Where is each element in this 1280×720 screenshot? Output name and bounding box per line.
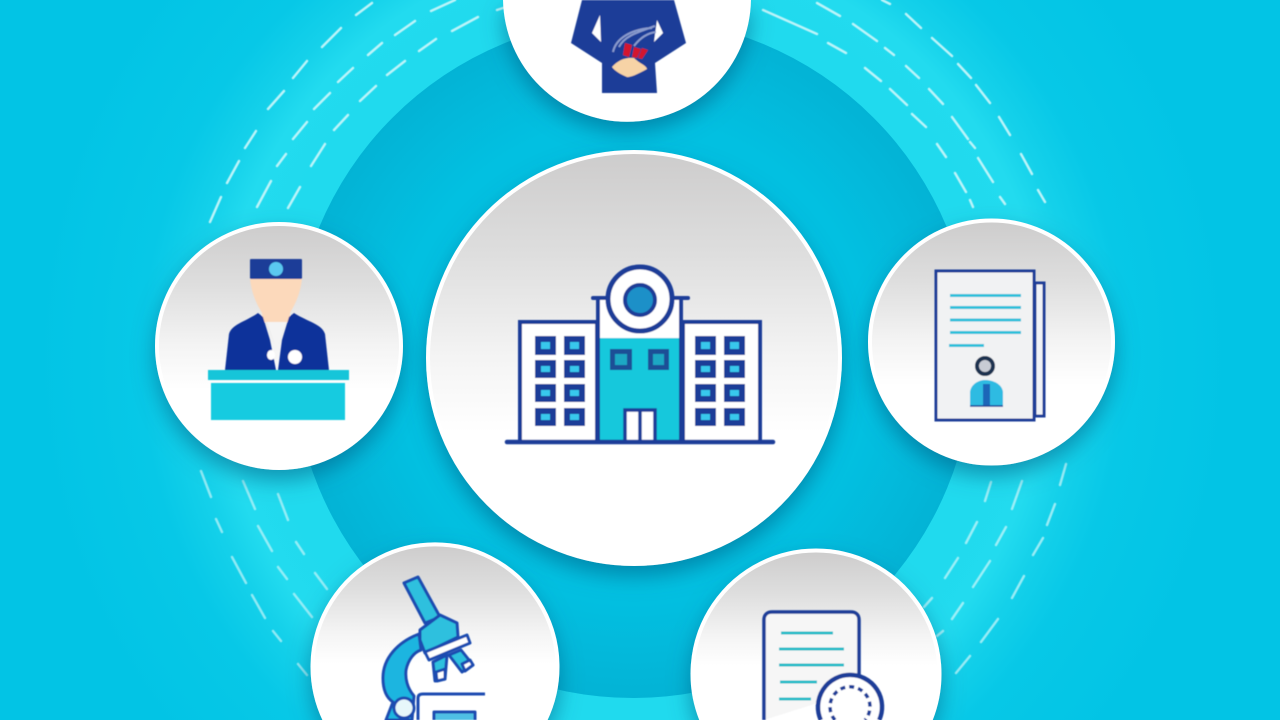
panel: central hub, hospital — [428, 152, 840, 564]
centre windows — [612, 352, 666, 368]
clock medallion — [608, 267, 672, 331]
panel: top step, patient with abdominal pain — [503, 0, 751, 122]
panel: bottom-right step, medical report — [692, 550, 940, 720]
inner dark disc — [293, 18, 973, 698]
icon: report with seal — [764, 612, 882, 720]
dashed orbit arcs — [201, 0, 1066, 675]
icon: patient document — [936, 271, 1044, 420]
panel: bottom-left step, laboratory — [312, 544, 558, 720]
door — [625, 410, 655, 442]
side windows — [538, 339, 742, 423]
icon: receptionist at desk — [208, 259, 349, 420]
icon: microscope — [383, 577, 485, 720]
icon: patient holding stomach — [571, 0, 686, 93]
panel: left step, reception — [157, 224, 401, 468]
panel: right step, patient record — [870, 220, 1113, 464]
icon: hospital building — [507, 267, 773, 442]
